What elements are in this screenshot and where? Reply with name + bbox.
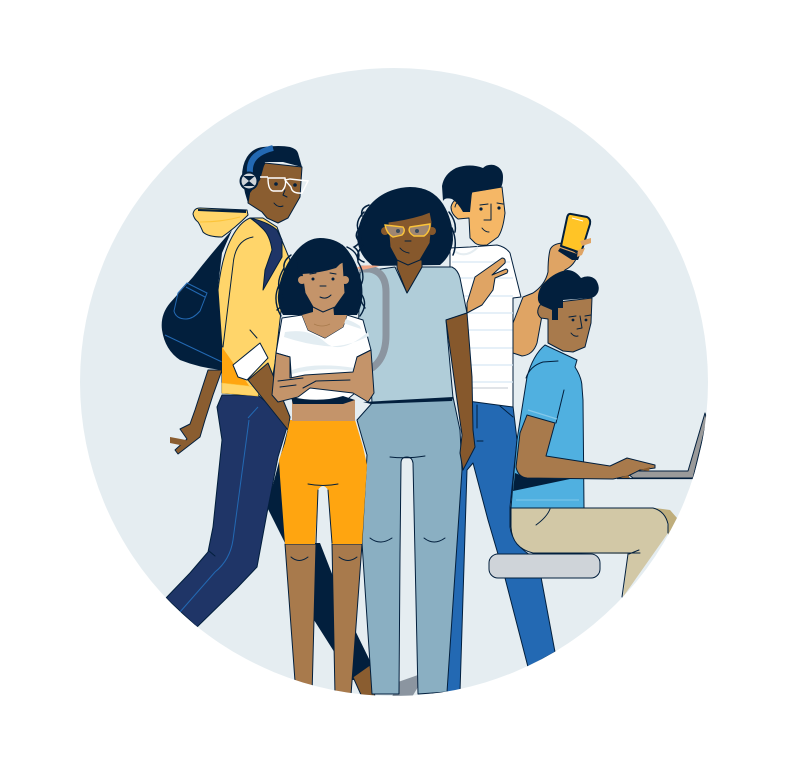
hair [276,238,365,316]
back leg and foot of man with backpack [267,428,375,697]
waistband [363,397,453,404]
phone [558,214,591,260]
person: man with backpack and headphones [162,146,308,627]
trousers [357,397,462,694]
yellow glasses [385,224,430,237]
scrub top [358,267,467,403]
hair [538,270,599,320]
person: woman in scrubs [354,187,475,694]
jeans [446,400,555,693]
seat [489,554,600,578]
rolled white cuff [233,343,268,380]
hair [242,146,302,203]
group of people [162,146,707,697]
forearm [248,363,290,430]
hair [354,187,455,266]
background circle [80,68,708,696]
stethoscope strap [362,269,386,368]
white glasses [260,177,308,193]
illustration: five people in a circle [80,68,708,696]
neck and face [451,187,505,245]
khaki trousers [511,508,668,597]
hood [193,208,248,237]
arm and hand [446,313,475,470]
shoulder strap [250,218,282,290]
neck and chest [302,303,347,338]
pink hand on shoulder [356,265,380,270]
face [381,212,436,265]
hair [442,165,503,212]
person: man with phone [442,165,591,693]
neck and head [538,298,592,352]
headband [250,148,273,173]
orange shorts [279,420,367,544]
blue polo shirt [511,345,584,508]
midriff [292,400,355,421]
neck and face [248,163,302,223]
raised arm and hand [513,243,578,356]
fringe [296,238,347,274]
white t-shirt [276,315,371,404]
trousers [166,395,290,627]
backpack [162,230,232,370]
neck [397,260,422,293]
grey shoe [392,675,418,697]
legs [285,544,362,695]
person: seated man at laptop [489,270,707,597]
white striped t-shirt [450,245,521,407]
arm and hand [516,410,655,479]
face [298,262,349,312]
person: girl with crossed arms [272,238,374,695]
back arm and hand [170,370,222,454]
gesturing hand [467,258,508,313]
laptop [617,413,707,478]
arm shadow [513,473,570,491]
crossed arms [272,350,374,402]
headphone ear cup [240,172,258,190]
back knee [655,508,677,535]
yellow hoodie [218,218,290,396]
